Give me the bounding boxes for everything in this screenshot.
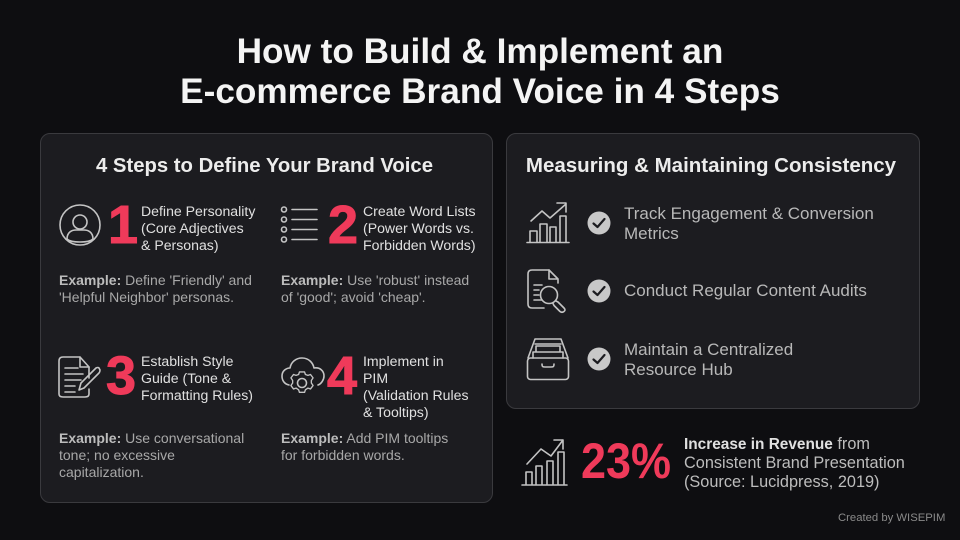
title: E-commerce Brand Voice in 4 Steps	[180, 72, 780, 110]
stat description: Increase in Revenue from	[684, 434, 870, 452]
step 3 text: Guide (Tone &	[141, 370, 231, 386]
item 2: Conduct Regular Content Audits	[624, 280, 867, 300]
item 3	[624, 340, 793, 378]
icon: document with pencil	[58, 356, 101, 398]
step 2 text: Create Word Lists	[363, 202, 476, 218]
step 4 text: PIM	[363, 370, 388, 386]
number 4: 4	[327, 346, 357, 406]
title	[180, 32, 780, 110]
item 1	[624, 204, 874, 242]
check 3	[588, 348, 610, 370]
example 1	[59, 272, 252, 305]
number 1: 1	[108, 195, 138, 255]
step 1 text: & Personas)	[141, 236, 219, 252]
step 3 text: Formatting Rules)	[141, 386, 253, 402]
step 3 text	[141, 352, 253, 403]
item 3: Maintain a Centralized	[624, 340, 793, 358]
step 1 text	[141, 202, 256, 253]
step 2 text: (Power Words vs.	[363, 220, 474, 236]
stat description	[684, 434, 905, 490]
step 2 text	[363, 202, 476, 253]
example 1: Example: Define 'Friendly' and	[59, 272, 252, 288]
item 1: Track Engagement & Conversion	[624, 204, 874, 222]
check 2	[588, 280, 610, 302]
stat description: (Source: Lucidpress, 2019)	[684, 472, 879, 490]
example 2: of 'good'; avoid 'cheap'.	[281, 289, 426, 305]
step 3 text: Establish Style	[141, 352, 233, 368]
step 4 text: & Tooltips)	[363, 404, 429, 420]
title: How to Build & Implement an	[237, 32, 723, 71]
stat 23%: 23%	[581, 433, 671, 489]
stat description: Consistent Brand Presentation	[684, 454, 905, 472]
icon: stat chart	[521, 439, 568, 486]
panel: define brand voice steps	[40, 133, 493, 503]
credit: Created by WISEPIM	[838, 512, 945, 524]
example 4: for forbidden words.	[281, 447, 405, 463]
number 3: 3	[106, 346, 136, 406]
example 2: Example: Use 'robust' instead	[281, 272, 469, 288]
example 1: 'Helpful Neighbor' personas.	[59, 289, 234, 305]
example 3: tone; no excessive	[59, 447, 175, 463]
icon: list	[280, 206, 318, 243]
icon: cloud with gear	[281, 357, 325, 393]
example 2	[281, 272, 469, 305]
step 2 text: Forbidden Words)	[363, 236, 476, 252]
heading: 4 steps: 4 Steps to Define Your Brand Voice	[96, 154, 433, 176]
step 1 text: Define Personality	[141, 202, 255, 218]
example 4	[281, 430, 448, 463]
step 4 text: Implement in	[363, 352, 444, 368]
number 2: 2	[328, 195, 358, 255]
step 4 text: (Validation Rules	[363, 386, 468, 402]
example 3: Example: Use conversational	[59, 430, 244, 446]
icon: growth chart	[526, 202, 570, 244]
icon: file drawer	[526, 338, 570, 380]
check 1	[588, 212, 610, 234]
step 1 text: (Core Adjectives	[141, 220, 244, 236]
icon: document audit	[527, 269, 566, 314]
step 4 text	[363, 352, 468, 420]
heading: measuring: Measuring & Maintaining Consistency	[526, 154, 896, 176]
icon: person	[59, 204, 101, 246]
example 3: capitalization.	[59, 464, 144, 480]
item 3: Resource Hub	[624, 360, 733, 378]
example 3	[59, 430, 244, 480]
item 1: Metrics	[624, 224, 679, 242]
example 4: Example: Add PIM tooltips	[281, 430, 448, 446]
panel: measuring	[506, 133, 920, 409]
